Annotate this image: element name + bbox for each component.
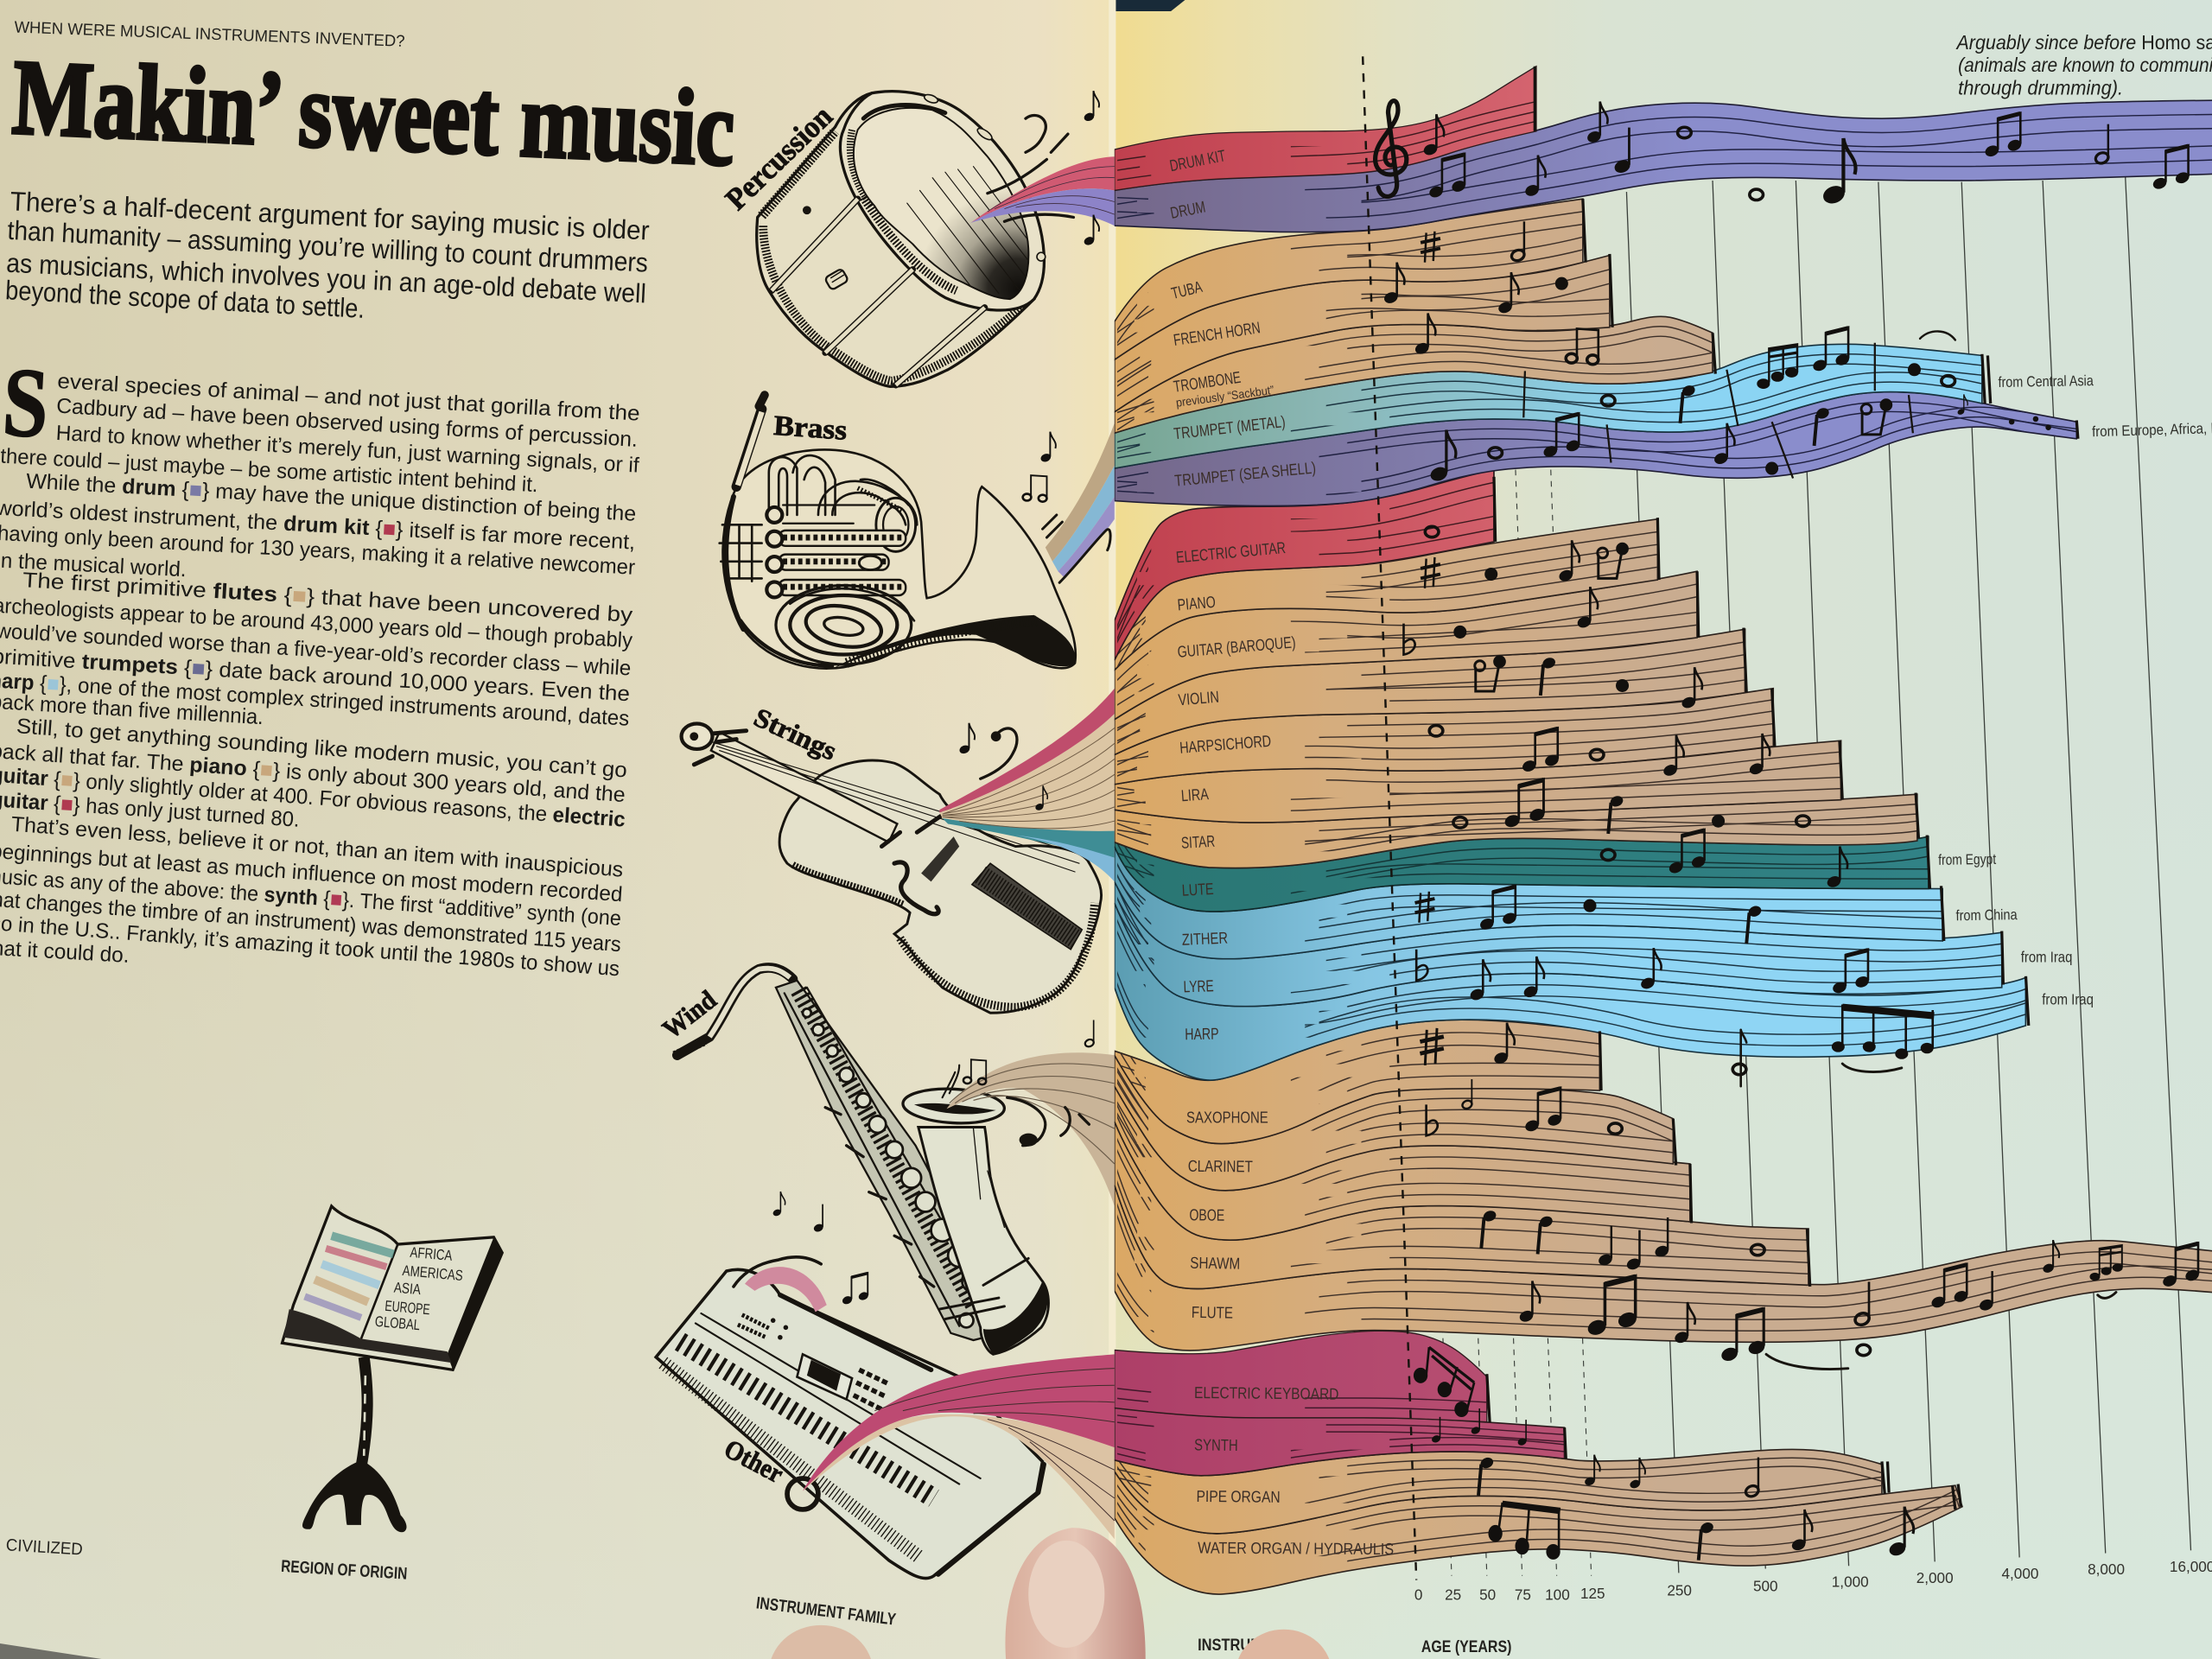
intro text block: as musicians, which involves you in an age-old debate well xyxy=(6,248,647,308)
instrument labels: PIPE ORGAN xyxy=(1196,1487,1281,1506)
instrument labels: LIRA xyxy=(1180,785,1210,804)
illustration: french horn (brass) xyxy=(720,395,1076,669)
age axis labels: 500 xyxy=(1753,1578,1778,1595)
intro text block xyxy=(4,186,650,324)
body text block: that changes the timbre of an instrument) was demonstrated 115 years xyxy=(0,887,622,957)
body text block: Still, to get anything sounding like modern music, you can’t go xyxy=(16,715,628,783)
axis caption: civilized: CIVILIZED xyxy=(5,1535,83,1560)
instrument labels: TRUMPET (METAL) xyxy=(1173,412,1287,442)
music notes: other rows xyxy=(1414,1347,1914,1560)
instrument labels: WATER ORGAN / HYDRAULIS xyxy=(1198,1539,1394,1558)
ribbon: oboe xyxy=(1115,1084,1691,1241)
origin notes: from Iraq xyxy=(2042,990,2094,1007)
colour stream: wind xyxy=(947,1052,1115,1206)
age grid lines xyxy=(1411,175,2191,1576)
ribbon: harpsichord xyxy=(1115,666,1773,807)
instrument labels xyxy=(1168,146,1394,1558)
ribbon: trumpet (metal) xyxy=(1115,325,1982,488)
age axis labels: 125 xyxy=(1580,1585,1605,1602)
age axis labels: 25 xyxy=(1445,1586,1461,1603)
instrument labels: ZITHER xyxy=(1181,929,1228,949)
instrument labels: TRUMPET (SEA SHELL) xyxy=(1173,458,1317,490)
instrument labels: OBOE xyxy=(1189,1205,1224,1224)
body text block: would’ve sounded worse than a five-year-old’s recorder class – while xyxy=(0,620,632,681)
body text block: world’s oldest instrument, the drum kit {■} itself is far more recent, xyxy=(0,497,636,555)
body text block: everal species of animal – and not just that gorilla from the xyxy=(57,370,640,426)
body text block: music as any of the above: the synth {■}. The first “additive” synth (one xyxy=(0,864,622,931)
ribbon: drum kit xyxy=(1115,36,1536,190)
title: Makin’ sweet music xyxy=(10,37,737,188)
icon: music stand legend: AMERICAS xyxy=(402,1262,464,1284)
instrument labels: SYNTH xyxy=(1194,1435,1238,1454)
illustration: violin (strings) xyxy=(682,724,1102,1013)
axis caption: age: AGE (YEARS) xyxy=(1421,1637,1511,1656)
instrument labels: ELECTRIC GUITAR xyxy=(1175,538,1287,566)
body text block: harp {■}, one of the most complex stringed instruments around, dates xyxy=(0,669,630,731)
body text block xyxy=(0,370,640,981)
instrument labels: PIANO xyxy=(1177,593,1217,613)
instrument labels: TROMBONE xyxy=(1173,368,1242,396)
instrument labels: HARP xyxy=(1185,1025,1219,1043)
instrument labels: LYRE xyxy=(1183,976,1214,995)
body text block: having only been around for 130 years, making it a relative newcomer xyxy=(0,522,636,580)
instrument labels: LUTE xyxy=(1181,880,1214,899)
notes around horn xyxy=(1023,432,1110,582)
origin notes: from China xyxy=(1955,906,2018,924)
instrument labels: SHAWM xyxy=(1190,1254,1240,1273)
ribbon: lute xyxy=(1115,836,1929,912)
ribbon: saxophone xyxy=(1115,1020,1600,1144)
ribbon: guitar (baroque) xyxy=(1115,546,1697,745)
ribbon: french horn xyxy=(1115,227,1610,440)
music notes: string rows xyxy=(1403,526,1934,1086)
origin notes: from Egypt xyxy=(1938,850,1996,868)
ribbon: water organ xyxy=(1115,1470,1963,1595)
ribbon: pipe organ xyxy=(1115,1448,1883,1535)
instrument labels: VIOLIN xyxy=(1178,688,1220,709)
age axis labels: 0 xyxy=(1414,1586,1422,1603)
illustration: snare drum (percussion) xyxy=(757,92,1046,386)
icon: music stand legend: EUROPE xyxy=(385,1297,431,1318)
illustration: electronic keyboard (other) xyxy=(656,1257,1044,1579)
label: other: Other xyxy=(720,1433,789,1489)
body text block: there could – just maybe – be some artistic intent behind it. xyxy=(0,445,538,497)
body text block: back all that far. The piano {■} is only about 300 years old, and the xyxy=(0,740,626,807)
ribbon: electric keyboard xyxy=(1115,1331,1488,1422)
instrument labels: previously “Sackbut” xyxy=(1175,383,1275,410)
instrument labels: DRUM KIT xyxy=(1168,146,1227,175)
ribbon: electric guitar xyxy=(1115,444,1494,685)
music notes: wind rows xyxy=(1420,1023,2201,1370)
notes around saxophone xyxy=(943,1020,1095,1147)
ribbon: violin xyxy=(1115,604,1745,780)
ribbon end bars xyxy=(1487,67,2078,1510)
ribbon: clarinet xyxy=(1115,1053,1675,1192)
body text block: Hard to know whether it’s merely fun, just warning signals, or if xyxy=(55,422,640,478)
origin notes xyxy=(1938,372,2212,1007)
instrument labels: TUBA xyxy=(1169,277,1205,302)
instrument labels: CLARINET xyxy=(1188,1157,1253,1175)
origin notes: from Central Asia xyxy=(1998,372,2094,391)
notes around drum xyxy=(988,91,1099,246)
intro text block: beyond the scope of data to settle. xyxy=(4,275,365,324)
age axis labels: 4,000 xyxy=(2002,1565,2038,1582)
age axis labels: 250 xyxy=(1667,1582,1692,1599)
fingers holding the book xyxy=(769,1528,1332,1659)
ribbon: shawm xyxy=(1115,1122,1809,1289)
ribbon: zither xyxy=(1115,847,1943,959)
instrument labels: FRENCH HORN xyxy=(1173,318,1262,349)
instrument labels: SAXOPHONE xyxy=(1186,1109,1268,1127)
age axis labels: 8,000 xyxy=(2088,1560,2125,1578)
notes around violin xyxy=(958,723,1047,811)
ribbon: drum xyxy=(1115,72,2212,260)
notes around keyboard xyxy=(772,1192,869,1306)
age axis labels: 1,000 xyxy=(1832,1573,1869,1591)
instrument labels: SITAR xyxy=(1180,832,1216,852)
icon: music stand legend: AFRICA xyxy=(410,1243,454,1264)
colour stream: other xyxy=(803,1354,1115,1539)
axis caption: instrument family: INSTRUMENT FAMILY xyxy=(755,1593,897,1630)
colour stream: percussion xyxy=(970,156,1115,226)
age axis labels: 100 xyxy=(1545,1586,1570,1603)
instrument labels: ELECTRIC KEYBOARD xyxy=(1194,1383,1339,1403)
label: percussion: Percussion xyxy=(719,99,839,217)
illustration: saxophone (wind) xyxy=(674,968,1048,1354)
ribbon: tuba xyxy=(1115,174,1583,385)
ribbon: sitar xyxy=(1115,793,1918,869)
instrument labels: DRUM xyxy=(1169,198,1207,222)
music notes: brass rows xyxy=(1382,221,2051,483)
intro text block: There’s a half-decent argument for saying music is older xyxy=(10,186,650,245)
body text block: guitar {■} only slightly older at 400. For obvious reasons, the electric xyxy=(0,764,626,832)
axis caption: region of origin: REGION OF ORIGIN xyxy=(281,1557,408,1584)
instrument labels: GUITAR (BAROQUE) xyxy=(1177,632,1296,661)
intro text block: than humanity – assuming you’re willing to count drummers xyxy=(7,215,649,278)
age axis labels: 75 xyxy=(1515,1586,1531,1603)
age axis labels xyxy=(1414,1558,2212,1603)
annotation: drumming origin: through drumming). xyxy=(1958,76,2123,99)
body text block: so in the U.S.. Frankly, it’s amazing it took until the 1980s to show us xyxy=(0,912,620,981)
body text block: While the drum {■} may have the unique distinction of being the xyxy=(26,470,637,526)
ribbon: trombone xyxy=(1115,296,1713,453)
chart: instrument ribbons xyxy=(1115,36,2212,1614)
music notes: percussion rows xyxy=(1376,101,2190,207)
icon: music stand legend: ASIA xyxy=(393,1279,422,1298)
axis caption: instrument: INSTRUMENT xyxy=(1198,1636,1291,1655)
body text block: in the musical world. xyxy=(0,549,187,582)
instrument labels: HARPSICHORD xyxy=(1179,732,1272,757)
icon: music stand legend: GLOBAL xyxy=(374,1313,421,1333)
ribbon: lyre xyxy=(1115,881,2003,1007)
age zero dashed line xyxy=(1363,56,1416,1580)
icon: music stand legend xyxy=(283,1206,502,1532)
body text block: Cadbury ad – have been observed using forms of percussion. xyxy=(55,395,639,452)
eyebrow heading: WHEN WERE MUSICAL INSTRUMENTS INVENTED? xyxy=(14,19,405,51)
label: brass: Brass xyxy=(772,410,848,447)
body text block: That’s even less, believe it or not, than an item with inauspicious xyxy=(10,813,624,882)
label: wind: Wind xyxy=(657,984,721,1045)
drop cap: S xyxy=(0,346,51,459)
body text block: primitive trumpets {■} date back around 10,000 years. Even the xyxy=(0,645,631,706)
age axis labels: 50 xyxy=(1479,1586,1496,1603)
measure lines in ribbons xyxy=(1523,343,1913,478)
label: strings: Strings xyxy=(749,702,842,766)
ribbon: trumpet (sea shell) xyxy=(1115,372,2076,525)
body text block: archeologists appear to be around 43,000 years old – though probably xyxy=(0,594,633,652)
annotation: drumming origin xyxy=(1955,31,2212,99)
colour stream: brass xyxy=(1046,423,1115,578)
colour stream: strings xyxy=(939,689,1115,881)
ribbon: lira xyxy=(1115,740,1842,823)
origin notes: from Iraq xyxy=(2021,948,2072,965)
ribbon: flute xyxy=(1115,1185,2212,1351)
body text block: The first primitive flutes {■} that have been uncovered by xyxy=(22,569,634,627)
instrument labels: FLUTE xyxy=(1192,1303,1233,1322)
ribbon: piano xyxy=(1115,493,1657,696)
age axis labels: 2,000 xyxy=(1916,1569,1954,1586)
ribbon: harp xyxy=(1115,902,2027,1081)
body text block: beginnings but at least as much influence on most modern recorded xyxy=(0,840,623,906)
ribbon: synth xyxy=(1115,1407,1566,1477)
